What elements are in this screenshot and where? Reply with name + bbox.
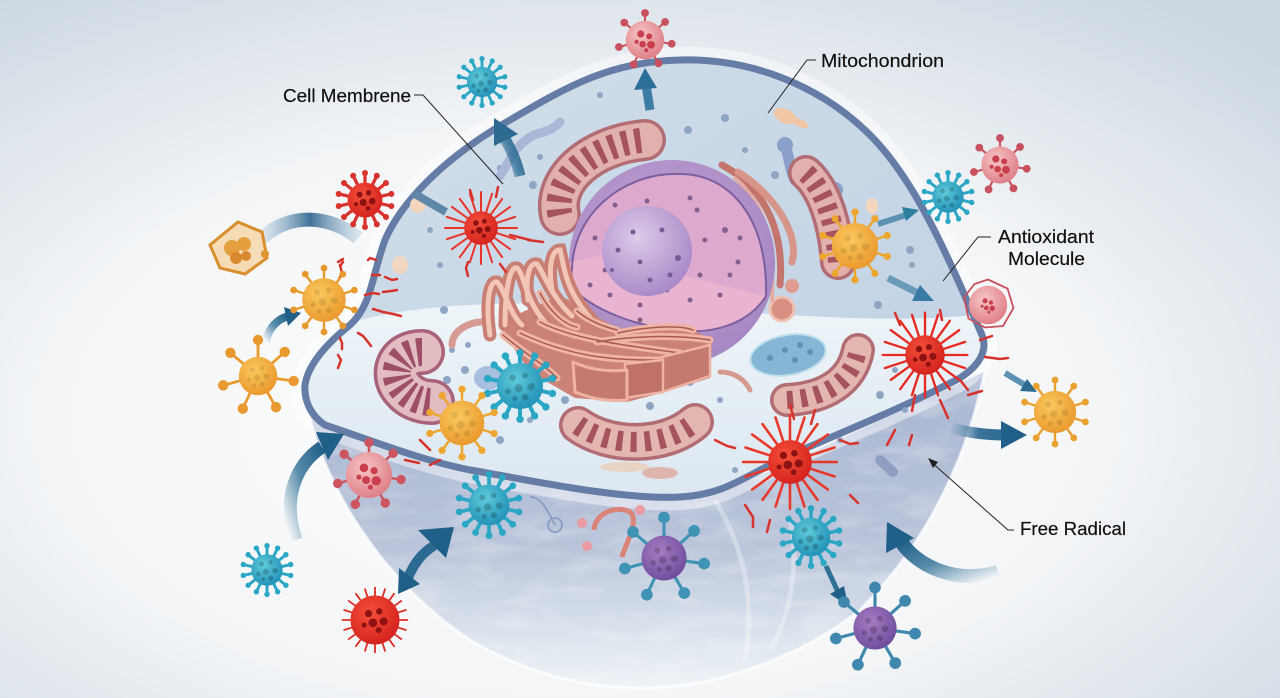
blue organelle xyxy=(747,329,829,381)
free radical: red bottom xyxy=(343,588,407,652)
vesicles and small organelles xyxy=(392,92,915,479)
arrow: small right xyxy=(1005,373,1037,392)
damaged molecule: pink left xyxy=(332,438,406,511)
label: Mitochondrion xyxy=(768,51,944,113)
arrow: top exit xyxy=(634,68,657,110)
bottom mitochondrion xyxy=(578,422,695,442)
arrow: small orange xyxy=(266,307,301,342)
damaged molecule: pink right xyxy=(969,134,1031,195)
antioxidant: orange far right xyxy=(1020,377,1090,447)
label: Free Radical xyxy=(928,458,1126,539)
label: Free Radical: Free Radical xyxy=(1020,519,1126,539)
antioxidant: orange pin xyxy=(217,335,300,416)
antioxidant: orange lower inner xyxy=(425,386,499,460)
arrow: to purple xyxy=(826,566,848,606)
virus: purple center xyxy=(618,512,711,602)
arrow: big lower right xyxy=(886,522,998,576)
label: Antioxidant Molecule: Molecule xyxy=(1008,249,1085,269)
cell interior and membrane xyxy=(305,60,984,497)
arrow: upper left xyxy=(494,118,520,176)
virus: purple bottom right xyxy=(829,582,922,672)
damaged molecule: pink top xyxy=(614,9,676,70)
nucleolus xyxy=(602,206,692,296)
upper right mitochondrion xyxy=(806,173,838,262)
antioxidant: orange right inner xyxy=(818,209,892,283)
left mitochondrion xyxy=(397,352,432,402)
golgi apparatus xyxy=(488,250,712,402)
lower hemisphere organelles xyxy=(530,460,893,557)
virus: blue bottom left xyxy=(240,543,294,597)
free radical fragments right xyxy=(405,310,1008,542)
arrow: right upper xyxy=(878,207,919,224)
arrows xyxy=(262,68,1037,606)
free radical: red lower center xyxy=(743,415,837,509)
arrow: big lower left xyxy=(290,432,344,540)
cut plane floor xyxy=(305,303,983,497)
antioxidant: orange spiky xyxy=(289,265,359,335)
label: Antioxidant Molecule: Antioxidant xyxy=(998,227,1094,247)
damaged molecule: pink mid right xyxy=(964,280,1014,328)
arrow: double headed xyxy=(398,527,454,594)
upper mitochondrion xyxy=(559,140,645,215)
band: orange to membrane xyxy=(262,220,358,238)
arrow: right mid xyxy=(888,278,934,301)
free radical: red inner xyxy=(445,192,517,264)
cell sphere lower hemisphere xyxy=(300,360,1000,695)
free radical fragments left xyxy=(338,187,543,368)
virus: blue lower right xyxy=(779,505,843,569)
rough ER right of nucleus xyxy=(722,165,793,300)
virus: blue lower xyxy=(455,471,523,539)
band: through membrane xyxy=(413,193,446,212)
arrow: right exit xyxy=(952,421,1027,449)
free radical: red right xyxy=(883,313,967,397)
label: Mitochondrion: Mitochondrion xyxy=(821,51,944,71)
nucleus xyxy=(569,160,775,366)
virus: blue top xyxy=(456,56,508,108)
label: Cell Membrene xyxy=(283,86,503,184)
label: Antioxidant Molecule xyxy=(943,227,1094,281)
virus: blue right xyxy=(921,170,975,224)
antioxidant: orange hexagon xyxy=(210,222,269,274)
free radical: red top xyxy=(335,170,395,230)
right mitochondrion xyxy=(787,350,858,400)
virus: blue inner xyxy=(483,349,557,423)
label: Cell Membrene: Cell Membrene xyxy=(283,86,411,106)
